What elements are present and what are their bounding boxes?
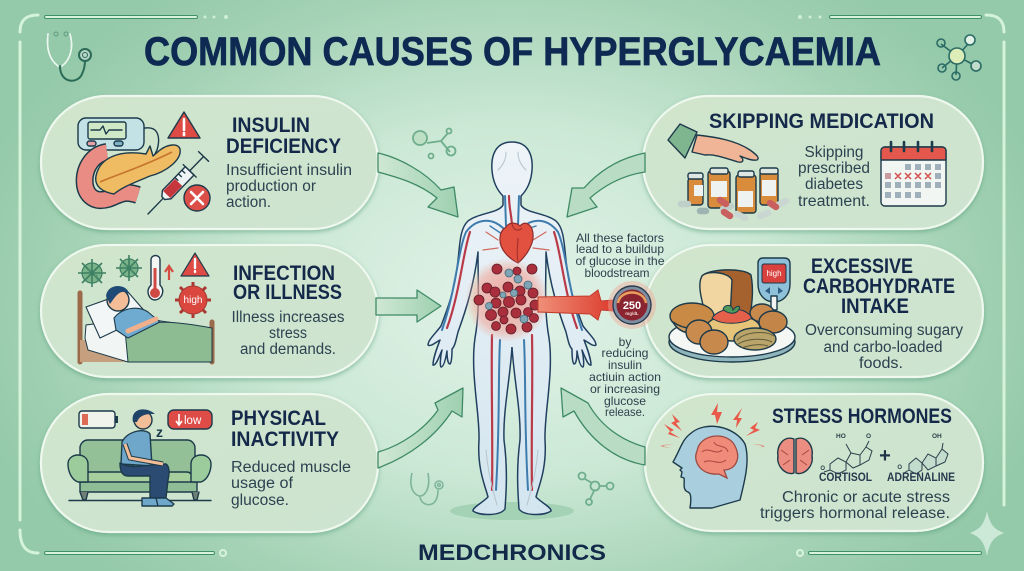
panel background xyxy=(41,245,378,377)
caption: reducing insulin action: actiuin action xyxy=(589,370,661,384)
panel: insulin deficiency xyxy=(41,96,378,229)
plus sign: + xyxy=(879,445,891,467)
icon: adrenaline molecule: OH xyxy=(932,433,942,440)
human body figure xyxy=(428,142,656,520)
heading xyxy=(233,261,342,304)
icon: cortisol molecule: O xyxy=(820,466,825,472)
vessels xyxy=(442,152,582,505)
heart xyxy=(500,223,533,263)
caption: reducing insulin action: insulin xyxy=(608,358,642,372)
icon: adrenaline molecule: O xyxy=(897,465,902,471)
body text: prescribed xyxy=(798,160,870,177)
icon: molecule top right xyxy=(937,35,981,80)
body text: Skipping xyxy=(804,144,864,161)
icon: person on sofa, low battery xyxy=(68,409,212,506)
icon: calendar with missed days xyxy=(881,142,946,206)
caption: reducing insulin action: release. xyxy=(605,405,645,419)
gauge 250 mg/dL: mg/dL xyxy=(625,311,639,316)
icon: glucose meter xyxy=(758,258,790,310)
arrow: infection to body xyxy=(376,290,441,322)
caption: reducing insulin action: by xyxy=(619,335,631,349)
sparkle xyxy=(970,511,1004,556)
warning triangle xyxy=(181,253,209,276)
body text: usage of xyxy=(231,475,294,492)
arrow: insulin deficiency to body xyxy=(378,153,458,217)
icon: cortisol molecule: HO xyxy=(836,433,846,440)
gauge 250 mg/dL xyxy=(608,281,656,329)
shadow under feet xyxy=(450,502,574,520)
arrow: inactivity to body xyxy=(378,388,463,468)
icon: brain xyxy=(778,438,812,474)
heading: PHYSICAL xyxy=(231,406,326,430)
body text xyxy=(760,489,950,522)
heading: EXCESSIVE xyxy=(811,254,913,278)
hormone labels: ADRENALINE xyxy=(887,470,955,484)
title: COMMON CAUSES OF HYPERGLYCAEMIA xyxy=(144,30,881,74)
brand: MEDCHRONICS: MEDCHRONICS xyxy=(418,540,606,565)
warning triangle xyxy=(168,112,200,138)
body text: triggers hormonal release. xyxy=(760,505,950,522)
icon: adrenaline molecule xyxy=(897,433,948,474)
heading xyxy=(803,254,955,318)
body text xyxy=(805,322,963,372)
body text: glucose. xyxy=(231,492,289,509)
panel background xyxy=(41,394,378,532)
panel background xyxy=(643,96,983,229)
body text: Reduced muscle xyxy=(231,459,351,476)
caption: buildup of glucose: bloodstream xyxy=(584,266,650,280)
syringe xyxy=(142,150,210,220)
arrow: skipping medication to body xyxy=(567,153,645,217)
icon: insulin pump, pancreas, syringe xyxy=(78,112,210,220)
body text xyxy=(232,309,345,358)
icon: glucose meter: high xyxy=(766,269,782,278)
decorative molecules and stethoscope xyxy=(411,128,614,505)
hormone labels xyxy=(819,470,955,484)
caption: buildup of glucose: All these factors xyxy=(576,231,664,245)
heading: INACTIVITY xyxy=(231,427,339,451)
body text: stress xyxy=(269,325,307,342)
body text: and demands. xyxy=(240,341,336,358)
body text xyxy=(798,144,870,210)
high virus xyxy=(175,282,211,318)
panel: infection or illness xyxy=(41,245,378,377)
panel background xyxy=(41,96,378,229)
heading: INFECTION xyxy=(233,261,335,285)
heading: STRESS HORMONES xyxy=(772,404,952,428)
body text xyxy=(226,162,352,211)
cross icon xyxy=(184,185,210,211)
panel background xyxy=(645,394,983,531)
icon: sick person in bed, viruses, thermometer xyxy=(78,253,212,362)
icon: plate of carbohydrates xyxy=(669,270,795,362)
heading: INSULIN xyxy=(232,113,310,137)
icon: person on sofa, low battery: low xyxy=(184,415,202,427)
heading xyxy=(226,113,341,158)
body text: action. xyxy=(226,194,271,211)
body text: Illness increases xyxy=(232,309,345,326)
icon: cortisol molecule xyxy=(820,433,872,474)
icon: cortisol molecule: O xyxy=(866,433,871,440)
arrow: stress hormones to body xyxy=(561,388,645,465)
body text: foods. xyxy=(859,355,903,372)
glucose cluster xyxy=(465,258,549,342)
heading: SKIPPING MEDICATION xyxy=(709,109,934,133)
panel: stress hormones xyxy=(645,394,983,531)
caption: reducing insulin action: or increasing xyxy=(590,382,660,396)
body text: Chronic or acute stress xyxy=(782,489,950,506)
panel: excessive carbohydrate intake xyxy=(645,245,983,377)
body text: treatment. xyxy=(798,193,870,210)
caption: reducing insulin action: reducing xyxy=(602,346,648,360)
silhouette xyxy=(428,142,596,515)
icon: head with stressed brain xyxy=(660,403,765,508)
caption: buildup of glucose: of glucose in the xyxy=(576,254,665,268)
body text: diabetes xyxy=(805,176,863,193)
caption: buildup of glucose xyxy=(576,231,665,280)
icon: person on sofa, low battery: z xyxy=(156,424,163,440)
caption: reducing insulin action: glucose xyxy=(604,394,646,408)
caption: buildup of glucose: lead to a buildup xyxy=(576,242,664,256)
body text: and carbo-loaded xyxy=(824,339,942,356)
heading: INTAKE xyxy=(841,294,909,318)
hormone labels: CORTISOL xyxy=(819,470,872,484)
icon: hand over pill bottles xyxy=(668,124,786,218)
body text: Insufficient insulin xyxy=(226,162,352,179)
panel background xyxy=(645,245,983,377)
arrow: glucose level to cluster xyxy=(538,290,613,320)
caption: reducing insulin action xyxy=(589,335,661,419)
panel: skipping medication xyxy=(643,96,983,229)
body text: Overconsuming sugary xyxy=(805,322,963,339)
heading: DEFICIENCY xyxy=(226,134,341,158)
heading xyxy=(231,406,339,451)
body text: production or xyxy=(226,178,316,195)
icon: stethoscope top left xyxy=(47,32,91,81)
body text xyxy=(231,459,351,509)
heading: CARBOHYDRATE xyxy=(803,274,955,298)
panel: physical inactivity xyxy=(41,394,378,532)
heading: OR ILLNESS xyxy=(233,280,342,304)
gauge 250 mg/dL: 250 xyxy=(623,300,641,312)
icon: sick person in bed, viruses, thermometer: high xyxy=(184,295,202,306)
